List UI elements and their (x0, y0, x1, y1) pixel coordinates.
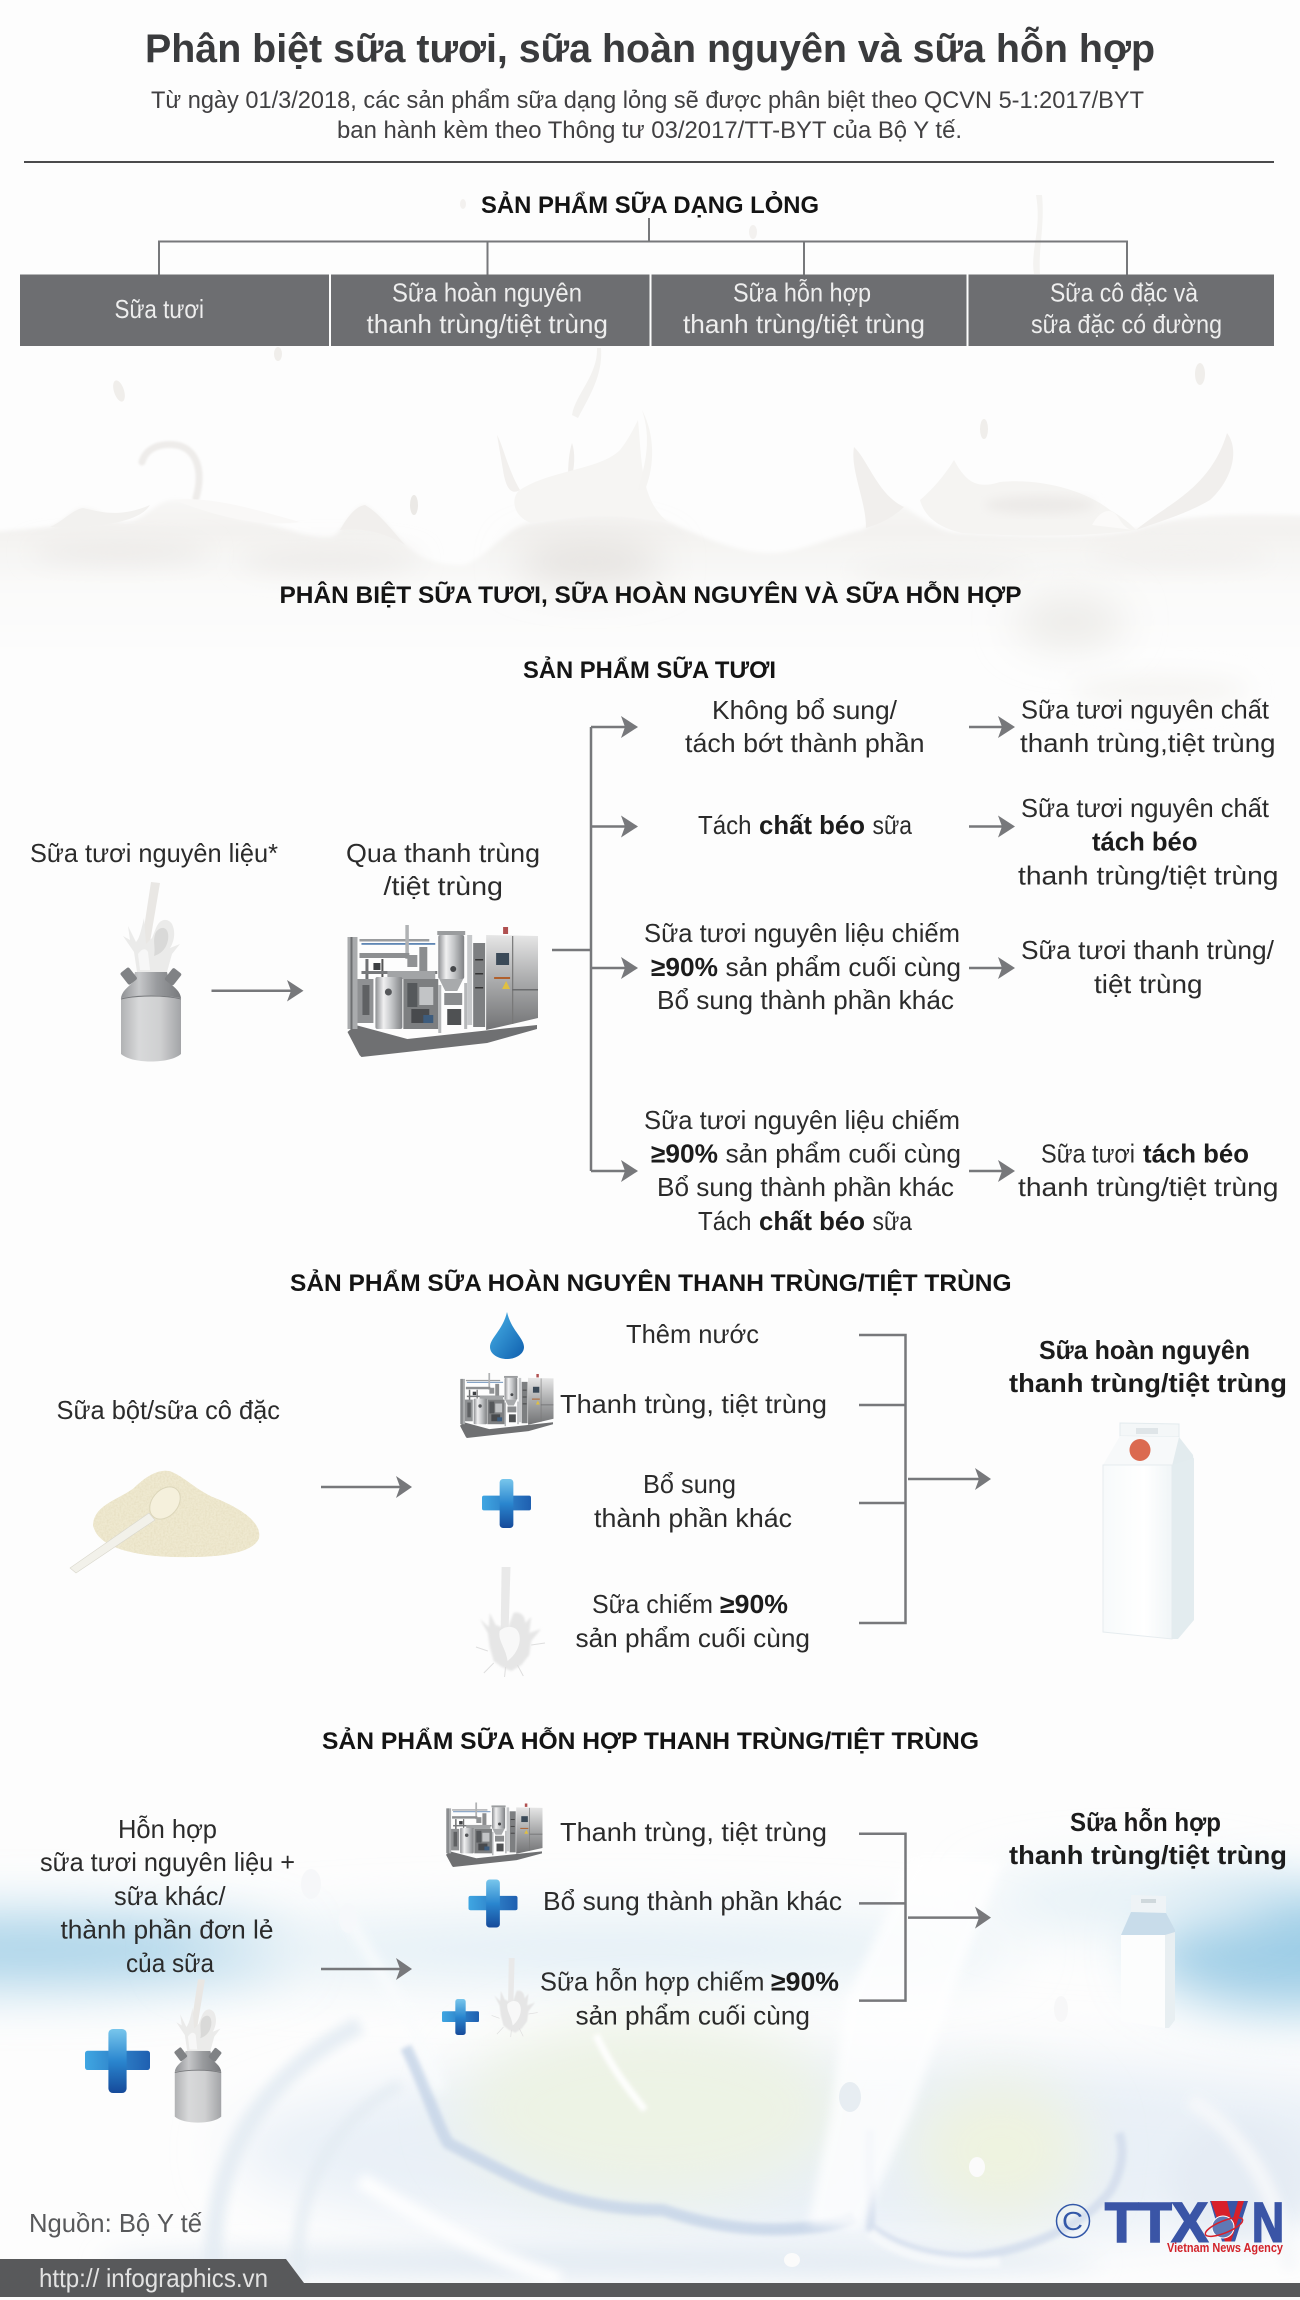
powder label: Sữa bột/sữa cô đặc (56, 1395, 280, 1425)
step label: add water: Thêm nước (626, 1319, 759, 1349)
heading: mixed milk: SẢN PHẨM SỮA HỖN HỢP THANH TRÙNG/TIỆT TRÙNG (322, 1726, 979, 1755)
bracket and arrow to result (859, 1335, 991, 1623)
icon: processing machine small (460, 1373, 554, 1438)
icon: plus large (85, 2029, 150, 2093)
panel: reconstituted milk (56, 1268, 1287, 1677)
category band: sữa đặc có đường (1031, 309, 1222, 339)
icon: plus (468, 1880, 518, 1928)
agency wordmark: TTX (1105, 2190, 1208, 2254)
step label: 90 percent: ≥90% (720, 1589, 788, 1619)
step label: add ingredients: Bổ sung (643, 1469, 736, 1499)
heading: fresh milk: SẢN PHẨM SỮA TƯƠI (523, 655, 776, 684)
result label (1009, 1335, 1287, 1398)
result 3: Sữa tươi thanh trùng/ (1021, 935, 1275, 965)
mixture label (40, 1814, 295, 1978)
step label: pasteurise: Thanh trùng, tiệt trùng (560, 1817, 827, 1847)
icon: milk carton (1103, 1423, 1194, 1639)
result 1 (1020, 694, 1276, 758)
result 4: Sữa tươi (1041, 1138, 1135, 1168)
milk splash background: upper (0, 195, 1300, 704)
raw milk label: Sữa tươi nguyên liệu* (30, 838, 278, 868)
heading: reconstituted milk: SẢN PHẨM SỮA HOÀN NGUYÊN THANH TRÙNG/TIỆT TRÙNG (290, 1268, 1011, 1297)
category band: thanh trùng/tiệt trùng (683, 309, 925, 339)
result 3 (1021, 935, 1275, 999)
result 1: Sữa tươi nguyên chất (1021, 694, 1270, 724)
milk background: lower (0, 1860, 1300, 2280)
step label: 90 percent: sản phẩm cuối cùng (576, 2000, 810, 2030)
panel: classification tree (20, 190, 1274, 346)
pasteurisation label: /tiệt trùng (384, 871, 503, 901)
subtitle: Từ ngày 01/3/2018, các sản phẩm sữa dạng lỏng sẽ được phân biệt theo QCVN 5-1:2017/BYT (151, 87, 1144, 114)
result label: thanh trùng/tiệt trùng (1009, 1368, 1287, 1398)
panel: fresh milk products (30, 655, 1278, 1236)
branch 3: condition: ≥90% (651, 952, 718, 982)
pouring milk column (808, 1860, 1003, 2230)
category band: thanh trùng/tiệt trùng (366, 309, 608, 339)
result 4 (1018, 1138, 1278, 1202)
agency wordmark: N (1252, 2190, 1284, 2254)
icon: processing machine small (446, 1802, 542, 1867)
branch 1: condition: tách bớt thành phần (685, 728, 924, 758)
branch 2: condition (698, 810, 912, 840)
category band: Sữa hoàn nguyên (392, 278, 582, 308)
branch 1: condition (685, 695, 924, 758)
step label: 90 percent (540, 1967, 839, 2030)
step label: add ingredients: Bổ sung thành phần khác (543, 1886, 842, 1916)
copyright mark: C (1062, 2206, 1083, 2236)
result 2: tách béo (1092, 827, 1198, 857)
category band: Sữa hỗn hợp (733, 278, 871, 308)
arrow: mixture to steps (321, 1958, 412, 1980)
panel: mixed milk (40, 1726, 1287, 2123)
branch 4: condition: chất béo (759, 1206, 865, 1236)
step label: 90 percent: sản phẩm cuối cùng (576, 1623, 810, 1653)
branch 4: condition: Tách (698, 1206, 752, 1236)
heading: liquid milk products: SẢN PHẨM SỮA DẠNG LỎNG (481, 190, 819, 219)
footer bar (0, 2259, 1300, 2297)
icon: water drop (490, 1312, 524, 1359)
icon: processing machine (348, 925, 538, 1057)
step label: 90 percent: Sữa hỗn hợp chiếm (540, 1967, 764, 1997)
result label: Sữa hoàn nguyên (1039, 1335, 1250, 1365)
result 2 (1018, 793, 1278, 891)
step label: pasteurise: Thanh trùng, tiệt trùng (560, 1389, 827, 1419)
branch 4: condition: sữa (872, 1206, 912, 1236)
branch 4: condition: Sữa tươi nguyên liệu chiếm (644, 1105, 960, 1135)
branching connector with arrows (552, 716, 638, 1182)
crest hook left (142, 445, 199, 498)
branch 4: condition: Bổ sung thành phần khác (657, 1172, 954, 1202)
icon: milk can (120, 882, 182, 1062)
result 2: thanh trùng/tiệt trùng (1018, 861, 1278, 891)
branch 4: condition (644, 1105, 961, 1236)
bracket and arrow to result (859, 1834, 991, 2001)
branch 3: condition (644, 918, 961, 1015)
result 4: thanh trùng/tiệt trùng (1018, 1172, 1278, 1202)
pasteurisation label (346, 838, 540, 901)
section heading: comparison: PHÂN BIỆT SỮA TƯƠI, SỮA HOÀN NGUYÊN VÀ SỮA HỖN HỢP (280, 580, 1022, 609)
icon: plus (482, 1479, 531, 1528)
step label: add ingredients (594, 1469, 792, 1533)
branch 3: condition: Bổ sung thành phần khác (657, 985, 954, 1015)
icon: plus small (442, 1999, 479, 2035)
result 3: tiệt trùng (1094, 969, 1202, 999)
icon: milk splash (476, 1567, 545, 1677)
website url: http:// infographics.vn (39, 2263, 268, 2293)
branch 2: condition: chất béo (759, 810, 865, 840)
arrow: powder to steps (321, 1476, 412, 1498)
step label: 90 percent: ≥90% (771, 1967, 839, 1997)
step label: 90 percent (576, 1589, 810, 1653)
source: Nguồn: Bộ Y tế (29, 2208, 203, 2238)
branch 4: condition: sản phẩm cuối cùng (726, 1138, 961, 1168)
bowl rim left (406, 2047, 854, 2229)
branch 2: condition: Tách (698, 810, 752, 840)
branch 2: condition: sữa (872, 810, 912, 840)
copyright mark (1056, 2204, 1090, 2238)
spikes centre (497, 435, 520, 492)
tree connectors (159, 218, 1127, 275)
mixture label: thành phần đơn lẻ (60, 1914, 274, 1944)
subtitle (151, 87, 1144, 144)
icon: milk splash small (492, 1958, 538, 2037)
icon: milk carton small (1121, 1895, 1175, 2028)
icon: milk powder with scoop (70, 1471, 259, 1573)
title: Phân biệt sữa tươi, sữa hoàn nguyên và sữa hỗn hợp (145, 25, 1155, 71)
result label (1009, 1807, 1287, 1870)
spikes right (853, 447, 904, 528)
step label: add ingredients: thành phần khác (594, 1503, 792, 1533)
arrow: can to machine (212, 980, 304, 1002)
pasteurisation label: Qua thanh trùng (346, 838, 540, 868)
branch 3: condition: Sữa tươi nguyên liệu chiếm (644, 918, 960, 948)
branch 3: condition: sản phẩm cuối cùng (726, 952, 961, 982)
mixture label: sữa tươi nguyên liệu + (40, 1847, 295, 1877)
result arrows (969, 716, 1015, 1182)
result 2: Sữa tươi nguyên chất (1021, 793, 1270, 823)
mixture label: của sữa (126, 1948, 214, 1978)
category band (20, 274, 1274, 346)
logo: TTXVN (1056, 2190, 1284, 2255)
branch 4: condition: ≥90% (651, 1138, 718, 1168)
result label: thanh trùng/tiệt trùng (1009, 1840, 1287, 1870)
icon: milk can small (174, 1979, 222, 2123)
branch 1: condition: Không bổ sung/ (712, 695, 898, 725)
category band: Sữa tươi (114, 294, 204, 324)
mixture label: Hỗn hợp (118, 1814, 217, 1844)
category band: Sữa cô đặc và (1050, 278, 1198, 308)
step label: 90 percent: Sữa chiếm (592, 1589, 713, 1619)
subtitle: ban hành kèm theo Thông tư 03/2017/TT-BYT của Bộ Y tế. (337, 117, 962, 144)
agency wordmark (1105, 2190, 1284, 2254)
result 4: tách béo (1143, 1138, 1249, 1168)
mixture label: sữa khác/ (114, 1881, 226, 1911)
result label: Sữa hỗn hợp (1070, 1807, 1221, 1837)
result 1: thanh trùng,tiệt trùng (1020, 728, 1276, 758)
